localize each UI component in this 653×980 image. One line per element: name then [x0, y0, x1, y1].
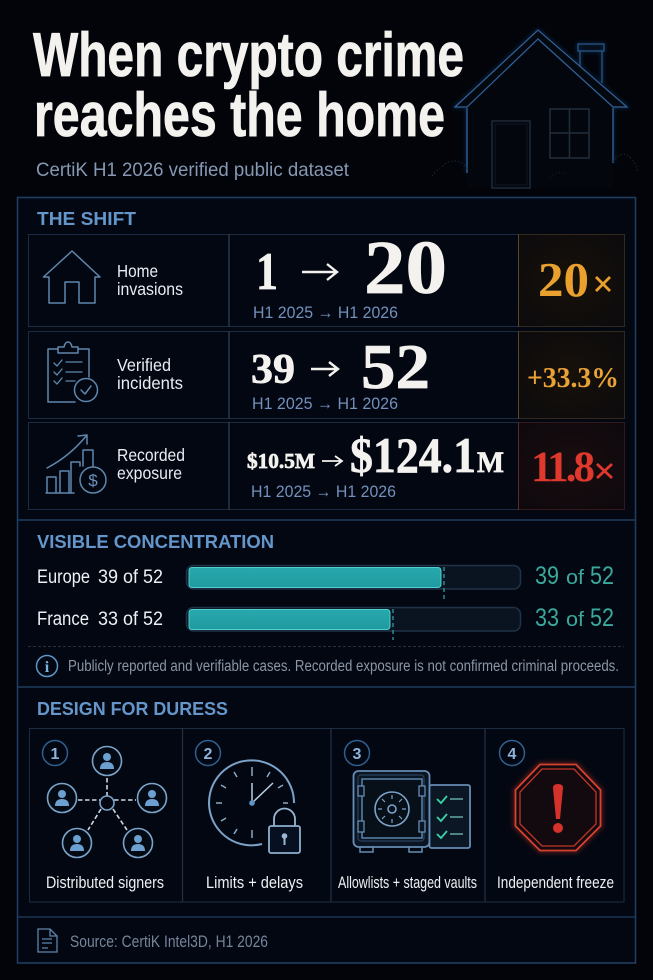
change: 11.8x: 11.8 [531, 444, 595, 491]
bar row: europe: Europe [37, 567, 90, 588]
badge 4: 4 [508, 746, 517, 763]
badge 2: 2 [204, 746, 213, 763]
bar row: france: 33 of 52 [98, 609, 163, 630]
label: recorded exposure [117, 445, 185, 483]
label: verified incidents [117, 355, 183, 393]
values: $10.5M to $124.1M: $10.5M [247, 449, 315, 473]
change: 20x: 20 [538, 252, 589, 307]
icon glyph: dollar: $ [88, 471, 98, 490]
values: 1 to 20: H1 2025 → H1 2026 [253, 304, 398, 322]
title: When crypto crime [33, 21, 464, 90]
icon: clock with padlock [209, 760, 300, 853]
panel: design for duress [30, 699, 624, 902]
row: recorded exposure [28, 422, 624, 510]
values: 1 to 20: 20 [364, 226, 447, 310]
bar row: france: of [566, 609, 584, 631]
icon: safe with checklist [354, 771, 470, 852]
heading: design for duress: DESIGN FOR DURESS [37, 699, 228, 719]
caption: limits and delays: Limits + delays [206, 874, 303, 892]
icon: document [38, 929, 57, 952]
heading: the shift: THE SHIFT [37, 209, 136, 229]
values: $10.5M to $124.1M: $124.1 [350, 427, 476, 483]
label: home invasions [117, 261, 183, 299]
icon: growth chart with coin [46, 435, 106, 493]
caption: independent freeze: Independent freeze [497, 874, 614, 892]
panel: visible concentration [28, 532, 624, 676]
icon: house illustration [432, 30, 638, 188]
badge 3 [344, 740, 370, 766]
bar row: europe [37, 562, 614, 600]
bar row: europe: 39 [535, 562, 559, 590]
values: $10.5M to $124.1M: H1 2025 → H1 2026 [251, 483, 396, 501]
values: 39 to 52: 39 [251, 347, 295, 393]
values: 1 to 20: 1 [256, 243, 278, 301]
card: limits and delays [196, 740, 303, 892]
label: recorded exposure: Recorded [117, 445, 185, 465]
label: verified incidents: incidents [117, 373, 183, 393]
footer: source [38, 929, 268, 952]
values: 39 to 52 [251, 331, 430, 413]
bar row: france: 33 [535, 604, 559, 632]
badge 1: 1 [51, 746, 60, 763]
badge 3: 3 [353, 746, 362, 763]
caption: allowlists and staged vaults: Allowlists + staged vaults [338, 874, 477, 892]
subtitle: CertiK H1 2026 verified public dataset [36, 159, 350, 181]
title: reaches the home [34, 81, 445, 150]
icon: stop octagon with exclamation [516, 764, 600, 850]
values: 39 to 52: 52 [361, 331, 430, 402]
bar row: france: France [37, 609, 89, 630]
row: home invasions [28, 226, 624, 327]
values: $10.5M to $124.1M: M [477, 446, 504, 479]
card: distributed signers [42, 740, 166, 892]
icon: info: i [45, 659, 50, 676]
panel: main frame [18, 198, 636, 963]
source text: Source: CertiK Intel3D, H1 2026 [70, 933, 268, 951]
caption: distributed signers: Distributed signers [46, 874, 164, 892]
icon: house outline [44, 251, 100, 303]
change: +33.3%: +33.3% [527, 362, 619, 394]
values: 39 to 52: H1 2025 → H1 2026 [252, 395, 398, 413]
title [33, 21, 464, 150]
bar row: europe: 39 of 52 [98, 567, 163, 588]
label: verified incidents: Verified [117, 355, 171, 375]
card: allowlists and staged vaults [338, 740, 477, 892]
icon: info [36, 656, 58, 676]
label: home invasions: Home [117, 261, 158, 281]
label: home invasions: invasions [117, 279, 183, 299]
row: verified incidents [28, 331, 624, 419]
icon: clipboard with check [48, 342, 98, 402]
values: 1 to 20 [253, 226, 447, 322]
badge 1 [42, 740, 68, 766]
bar row: europe: 52 [590, 562, 614, 590]
heading: visible concentration: VISIBLE CONCENTRATION [37, 532, 274, 552]
bar row: france: 52 [590, 604, 614, 632]
bar row: france [37, 604, 614, 640]
card: independent freeze [497, 740, 614, 892]
icon: signer network [48, 746, 166, 858]
change: 20x [538, 252, 610, 307]
badge 4 [500, 740, 524, 766]
label: recorded exposure: exposure [117, 463, 182, 483]
values: $10.5M to $124.1M [247, 427, 504, 501]
panel: the shift [28, 209, 624, 510]
badge 2 [196, 740, 220, 766]
bar row: europe: of [566, 567, 584, 589]
